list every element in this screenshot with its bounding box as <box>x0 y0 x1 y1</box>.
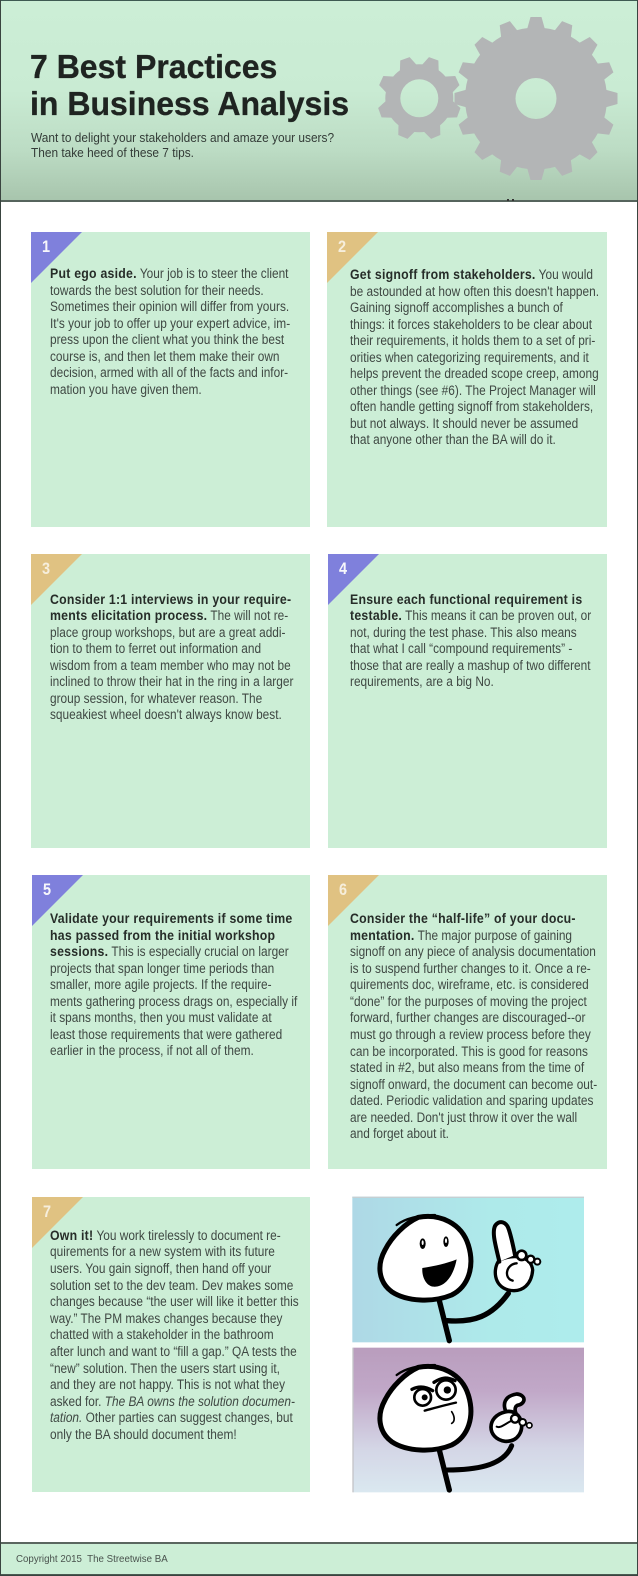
text: tip 7 <box>50 1227 299 1442</box>
title: 7 Best Practices <box>30 48 277 85</box>
copyright text: Copyright 2015 The Streetwise BA <box>16 1553 168 1565</box>
text: tip 5: least those requirements that were gathered <box>50 1026 282 1042</box>
text: tip 6: quirements doc, wireframe, etc. is considered <box>350 977 589 992</box>
text: tip 1: course is, and then let them make their own <box>50 349 280 364</box>
text: tip 3: Consider 1:1 interviews in your require- <box>50 591 291 607</box>
text: tip 3: group session, for whatever reason. The <box>50 691 262 706</box>
text: tip 7: users. You gain signoff, then hand off your <box>50 1261 271 1276</box>
subtitle <box>30 130 334 160</box>
text: tip 7: quirements for a new system with its future <box>50 1244 275 1259</box>
text: tip 6: is to suspend further changes to it. Once a re- <box>350 961 591 976</box>
text: tip 7: only the BA should document them! <box>50 1427 237 1442</box>
number 7: 7 <box>42 1202 51 1220</box>
icon: corner 1 <box>31 232 82 283</box>
number 5: 5 <box>42 880 51 898</box>
number 3: 3 <box>42 558 50 578</box>
text: tip 3: squeakiest wheel doesn't always know best. <box>50 707 282 722</box>
text: tip 6: must go through a review process before they <box>350 1027 591 1042</box>
text: tip 2: other things (see #6). The Project Manager will <box>350 383 596 398</box>
text: tip 5: has passed from the initial workshop <box>50 926 275 942</box>
header band <box>1 0 637 202</box>
text: tip 6: mentation. The major purpose of gaining <box>350 927 572 943</box>
text: tip 6 <box>350 910 597 1141</box>
text: tip 6: signoff on any piece of analysis documentation <box>350 944 596 959</box>
text: tip 1 <box>50 265 290 397</box>
text: tip 7: and they are not happy. This is not what they <box>50 1377 285 1392</box>
icon: gears <box>378 17 618 180</box>
subtitle: Want to delight your stakeholders and amaze your users? <box>30 130 334 145</box>
text: tip 5: earlier in the process, if not all of them. <box>50 1043 254 1058</box>
text: tip 6: are needed. Don't just throw it over the wall <box>350 1110 577 1125</box>
text: tip 6: stated in #2, but also means from the time of <box>350 1060 584 1075</box>
text: tip 2 <box>350 266 599 447</box>
text: tip 2: often handle getting signoff from stakeholders, <box>350 399 593 414</box>
panel: tip 6 <box>328 875 607 1169</box>
header bottom specks <box>507 199 514 201</box>
text: tip 7: way.” The PM makes changes because they <box>50 1311 282 1326</box>
text: tip 4: testable. This means it can be proven out, or <box>350 607 591 623</box>
text: tip 2: their requirements, it holds them to a set of pri- <box>350 333 595 348</box>
icon: corner 4 <box>328 554 379 605</box>
text: tip 5: smaller, more agile projects. If the require- <box>50 977 272 992</box>
text: tip 6: “done” for the purposes of moving the project <box>350 994 587 1009</box>
text: tip 5: it spans months, then you must validate at <box>50 1010 272 1025</box>
title <box>30 48 349 122</box>
text: tip 1: decision, armed with all of the facts and infor- <box>50 365 288 380</box>
icon: corner 5 <box>32 875 83 926</box>
text: tip 7: Own it! You work tirelessly to document re- <box>50 1227 281 1243</box>
text: tip 6: forward, further changes are discouraged--or <box>350 1010 585 1025</box>
subtitle: Then take heed of these 7 tips. <box>30 145 193 160</box>
text: tip 2: orities when categorizing requirements, and it <box>350 350 589 365</box>
text: tip 3 <box>50 591 294 722</box>
text: tip 4: requirements, are a big No. <box>350 674 494 689</box>
text: tip 4: not, during the test phase. This also means <box>350 625 577 640</box>
text: tip 4: those that are really a mashup of two different <box>350 658 591 673</box>
title: in Business Analysis <box>30 85 349 122</box>
text: tip 6: and forget about it. <box>350 1126 449 1141</box>
text: tip 7: after lunch and want to “fill a gap.” QA tests the <box>50 1344 297 1359</box>
text: tip 3: wisdom from a team member who may not be <box>50 658 291 673</box>
panel: tip 3 <box>31 554 310 848</box>
number 1: 1 <box>42 236 50 256</box>
panel: tip 5 <box>32 875 310 1169</box>
panel: tip 7 <box>32 1197 310 1492</box>
text: tip 1: mation you have given them. <box>50 382 202 397</box>
text: tip 3: ments elicitation process. The will not re- <box>50 607 288 623</box>
text: tip 4: that what I call “compound requirements” - <box>350 641 572 656</box>
number 2: 2 <box>338 236 346 256</box>
panel: tip 1 <box>31 232 310 527</box>
cartoon panel: happy figure <box>352 1197 584 1342</box>
text: tip 7: asked for. The BA owns the solution documen- <box>50 1394 295 1409</box>
text: tip 2: Gaining signoff accomplishes a bunch of <box>350 300 563 315</box>
text: tip 7: tation. Other parties can suggest changes, but <box>50 1410 293 1425</box>
cartoon: happy stick figure and puzzled stick figure <box>352 1196 584 1493</box>
text: tip 7: changes because “the user will like it better this <box>50 1294 299 1309</box>
text: tip 2: things: it forces stakeholders to be clear about <box>350 317 592 332</box>
icon: corner 6 <box>328 875 379 926</box>
icon: corner 2 <box>327 232 378 283</box>
number 6: 6 <box>339 880 347 898</box>
text: tip 6: Consider the “half-life” of your docu- <box>350 910 576 926</box>
text: tip 3: place group workshops, but are a great addi- <box>50 625 286 640</box>
text: tip 6: can be incorporated. This is good for reasons <box>350 1044 588 1058</box>
text: tip 7: solution set to the dev team. Dev makes some <box>50 1278 293 1293</box>
text: tip 7: chatted with a stakeholder in the bathroom <box>50 1327 274 1342</box>
text: tip 2: but not always. It should never be assumed <box>350 416 578 431</box>
text: tip 4: Ensure each functional requirement is <box>350 591 582 607</box>
text: tip 5: sessions. This is especially crucial on larger <box>50 943 289 959</box>
text: tip 6: dated. Periodic validation and sparing updates <box>350 1093 593 1108</box>
text: tip 1: Put ego aside. Your job is to steer the client <box>50 265 288 281</box>
text: tip 7: “new” solution. Then the users start using it, <box>50 1361 280 1376</box>
text: tip 3: inclined to throw their hat in the ring in a larger <box>50 674 293 689</box>
text: tip 5 <box>50 910 298 1058</box>
text: tip 3: tion to them to ferret out information and <box>50 641 261 656</box>
text: tip 2: helps prevent the dreaded scope creep, among <box>350 366 599 381</box>
text: tip 4 <box>350 591 591 689</box>
text: tip 2: Get signoff from stakeholders. You would <box>350 266 593 282</box>
panel: tip 4 <box>328 554 607 848</box>
text: tip 1: Sometimes their opinion will differ from yours. <box>50 299 289 314</box>
text: tip 1: It's your job to offer up your expert advice, im- <box>50 316 290 331</box>
text: tip 2: that anyone other than the BA will do it. <box>350 432 556 447</box>
text: tip 1: towards the best solution for their needs. <box>50 283 264 298</box>
panel: tip 2 <box>327 232 607 527</box>
text: tip 5: projects that span longer time periods than <box>50 960 274 976</box>
number 4: 4 <box>339 558 347 578</box>
footer band <box>1 1542 637 1575</box>
text: tip 5: ments gathering process drags on, especially if <box>50 994 297 1008</box>
text: tip 2: be astounded at how often this doesn't happen. <box>350 284 599 299</box>
cartoon panel: puzzled figure <box>352 1348 584 1492</box>
text: tip 5: Validate your requirements if some time <box>50 910 292 926</box>
icon: corner 7 <box>32 1197 83 1248</box>
text: tip 1: press upon the client what you think the best <box>50 332 284 347</box>
text: tip 6: signoff onward, the document can become out- <box>350 1077 597 1092</box>
icon: corner 3 <box>31 554 82 605</box>
